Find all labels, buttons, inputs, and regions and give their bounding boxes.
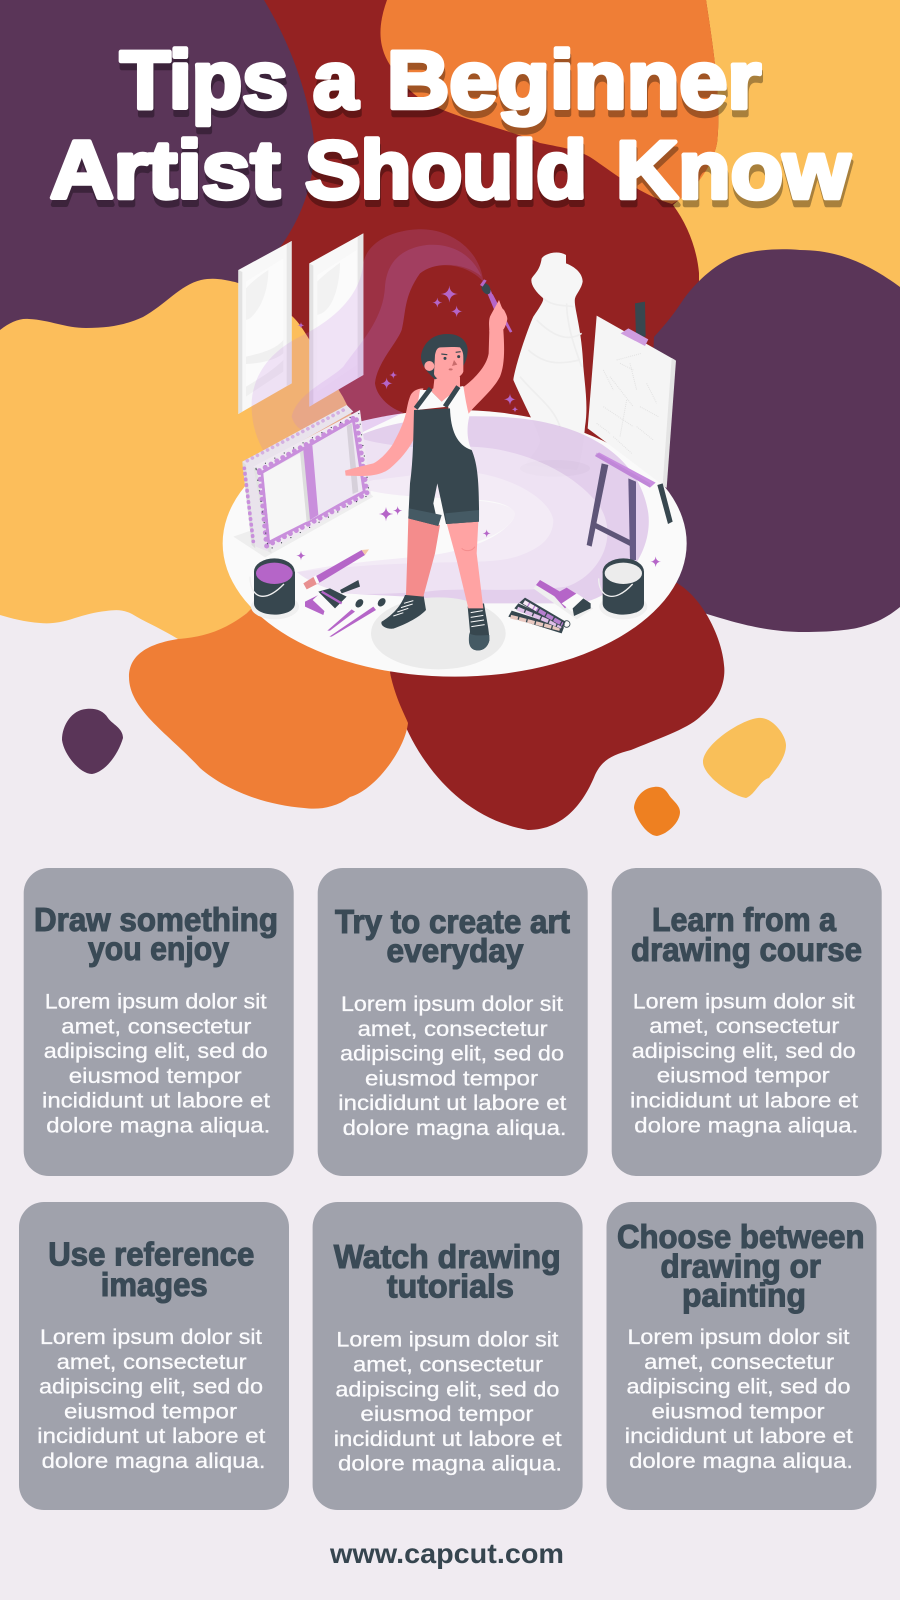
body text: dolore magna aliqua. [343,1116,567,1140]
shirt [417,386,472,450]
thin brushes [327,597,387,637]
hand [489,300,507,332]
body text: eiusmod tempor [69,1064,242,1088]
paint smoke in the air [252,229,483,497]
body text: adipiscing elit, sed do [39,1375,263,1399]
heading: Learn from a [652,901,837,938]
heading: images [101,1266,208,1303]
body text: amet, consectetur [57,1350,247,1374]
title [50,35,850,216]
body text: Lorem ipsum dolor sit [341,992,563,1016]
body text: eiusmod tempor [360,1402,533,1426]
paint bucket: white [599,558,647,619]
body text: incididunt ut labore et [42,1089,270,1113]
heading: tutorials [387,1268,514,1305]
far arm [345,388,423,476]
body text: adipiscing elit, sed do [44,1039,268,1063]
body text: dolore magna aliqua. [629,1449,853,1473]
body text: amet, consectetur [649,1014,839,1038]
body text: dolore magna aliqua. [634,1113,858,1137]
body text: eiusmod tempor [365,1066,538,1090]
body text: Lorem ipsum dolor sit [336,1328,558,1352]
heading: painting [682,1277,806,1314]
body text: amet, consectetur [358,1017,548,1041]
illustration: artist painting in a studio [223,229,687,677]
heading: everyday [386,932,524,969]
body text: Lorem ipsum dolor sit [633,989,855,1013]
title: Know [616,125,850,216]
panel: choose between drawing or painting [606,1202,876,1510]
footer url: www.capcut.com [329,1538,564,1569]
panel: watch drawing tutorials [313,1202,583,1510]
flat paint brush [305,580,360,615]
title: Tips [120,35,288,126]
panel: learn from a drawing course [612,868,882,1176]
floor disk [223,410,687,677]
shoes [381,594,426,629]
wall frame 2 [309,233,363,407]
body text: incididunt ut labore et [37,1424,265,1448]
brush in hand [489,294,512,333]
heading: you enjoy [88,930,230,967]
easel [587,452,673,560]
panel: draw something you enjoy [24,868,294,1176]
heading: Try to create art [335,903,570,940]
heading: Use reference [48,1236,254,1273]
body text: adipiscing elit, sed do [632,1039,856,1063]
title: Beginner [387,35,761,126]
body text: incididunt ut labore et [630,1088,858,1112]
wall frame 1 [238,241,292,414]
background blobs [0,0,900,836]
heading: Choose between [617,1218,864,1255]
artist [345,279,512,650]
sparkles [296,285,661,567]
panel: try to create art everyday [318,868,588,1176]
overalls [408,408,479,526]
body text: eiusmod tempor [652,1399,825,1423]
legs [406,518,440,597]
body text: dolore magna aliqua. [46,1114,270,1138]
body text: Lorem ipsum dolor sit [40,1325,262,1349]
body text: incididunt ut labore et [338,1091,566,1115]
floor shadow [371,597,506,669]
plaster statue [513,253,590,477]
panel: use reference images [19,1202,289,1510]
leaning frames on floor [233,405,373,557]
body text: Lorem ipsum dolor sit [45,990,267,1014]
raised arm [462,330,504,414]
body text: adipiscing elit, sed do [340,1042,564,1066]
body text: amet, consectetur [644,1350,834,1374]
heading: drawing course [631,931,862,968]
body text: amet, consectetur [353,1352,543,1376]
head [421,334,468,379]
body text: Lorem ipsum dolor sit [628,1325,850,1349]
title: a [313,35,359,126]
paint smoke on the floor [267,416,649,603]
body text: amet, consectetur [61,1014,251,1038]
heading: drawing or [660,1248,821,1285]
body text: dolore magna aliqua. [42,1449,266,1473]
heading: Watch drawing [334,1238,561,1275]
body text: eiusmod tempor [64,1399,237,1423]
pencil [303,549,369,589]
body text: incididunt ut labore et [625,1424,853,1448]
body text: adipiscing elit, sed do [335,1377,559,1401]
canvas on easel [588,302,676,488]
body text: adipiscing elit, sed do [626,1375,851,1399]
heading: Draw something [34,901,278,938]
second flat brush [533,580,593,619]
title: Should [305,125,587,216]
body text: eiusmod tempor [657,1064,830,1088]
body text: dolore magna aliqua. [338,1452,562,1476]
colour swatches [508,598,570,633]
body text: incididunt ut labore et [334,1427,562,1451]
neck [430,373,460,402]
paint bucket: purple [250,558,299,619]
title: Artist [50,125,280,216]
